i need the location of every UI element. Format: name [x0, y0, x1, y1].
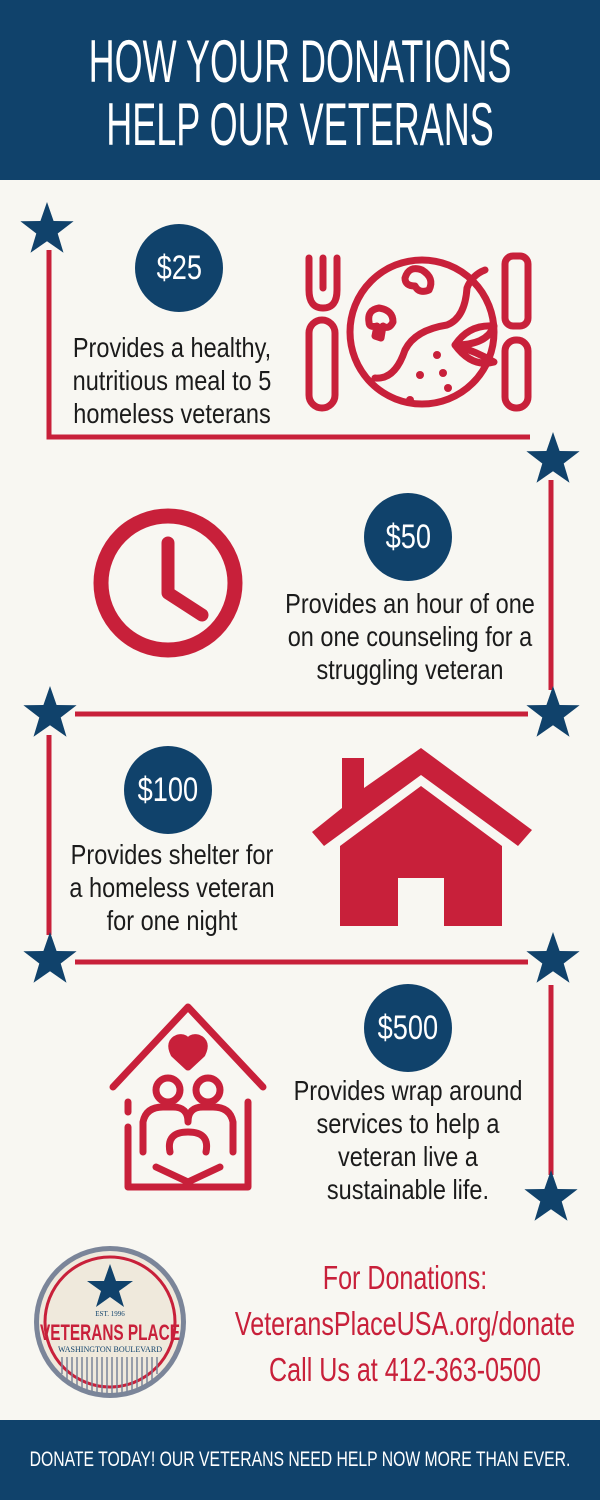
- badge $500: [364, 984, 452, 1072]
- text $500: sustainable life.: [327, 1174, 489, 1205]
- badge $100: $100: [138, 771, 198, 809]
- text $25: Provides a healthy,: [73, 332, 271, 363]
- text $500: veteran live a: [338, 1141, 478, 1172]
- footer: [0, 1420, 600, 1500]
- icon: house: [312, 748, 532, 926]
- donation info: Call Us at 412-363-0500: [269, 1351, 541, 1388]
- text $500: services to help a: [316, 1108, 500, 1139]
- icon: family home: [110, 1004, 266, 1190]
- icon: plate: [306, 252, 532, 412]
- badge $50: [364, 493, 452, 581]
- badge $25: [135, 224, 223, 312]
- title: HOW YOUR DONATIONS: [89, 28, 511, 95]
- text $50: on one counseling for a: [288, 621, 532, 652]
- badge $50: $50: [385, 518, 431, 556]
- text $25: homeless veterans: [73, 398, 271, 429]
- badge $25: $25: [156, 249, 202, 287]
- text $500: Provides wrap around: [294, 1075, 522, 1106]
- text $50: struggling veteran: [317, 654, 503, 685]
- text $25: [73, 332, 271, 429]
- text $100: a homeless veteran: [69, 872, 275, 903]
- title: HELP OUR VETERANS: [106, 91, 494, 158]
- text $100: Provides shelter for: [71, 839, 273, 870]
- text $100: for one night: [107, 905, 237, 936]
- logo: EST. 1996: [95, 1310, 125, 1318]
- footer text: DONATE TODAY! OUR VETERANS NEED HELP NOW MORE THAN EVER.: [30, 1448, 570, 1471]
- logo: [34, 1246, 186, 1398]
- donation info: [235, 1259, 575, 1388]
- text $50: [285, 588, 535, 685]
- donation info: For Donations:: [323, 1259, 487, 1296]
- logo: WASHINGTON BOULEVARD: [58, 1345, 162, 1354]
- text $500: [294, 1075, 522, 1205]
- badge $100: [124, 746, 212, 834]
- header: [0, 0, 600, 180]
- text $50: Provides an hour of one: [285, 588, 535, 619]
- donation info: VeteransPlaceUSA.org/donate: [235, 1305, 575, 1342]
- icon: clock: [94, 508, 242, 658]
- text $100: [69, 839, 275, 936]
- badge $500: $500: [378, 1009, 438, 1047]
- text $25: nutritious meal to 5: [73, 365, 271, 396]
- title: [89, 28, 511, 158]
